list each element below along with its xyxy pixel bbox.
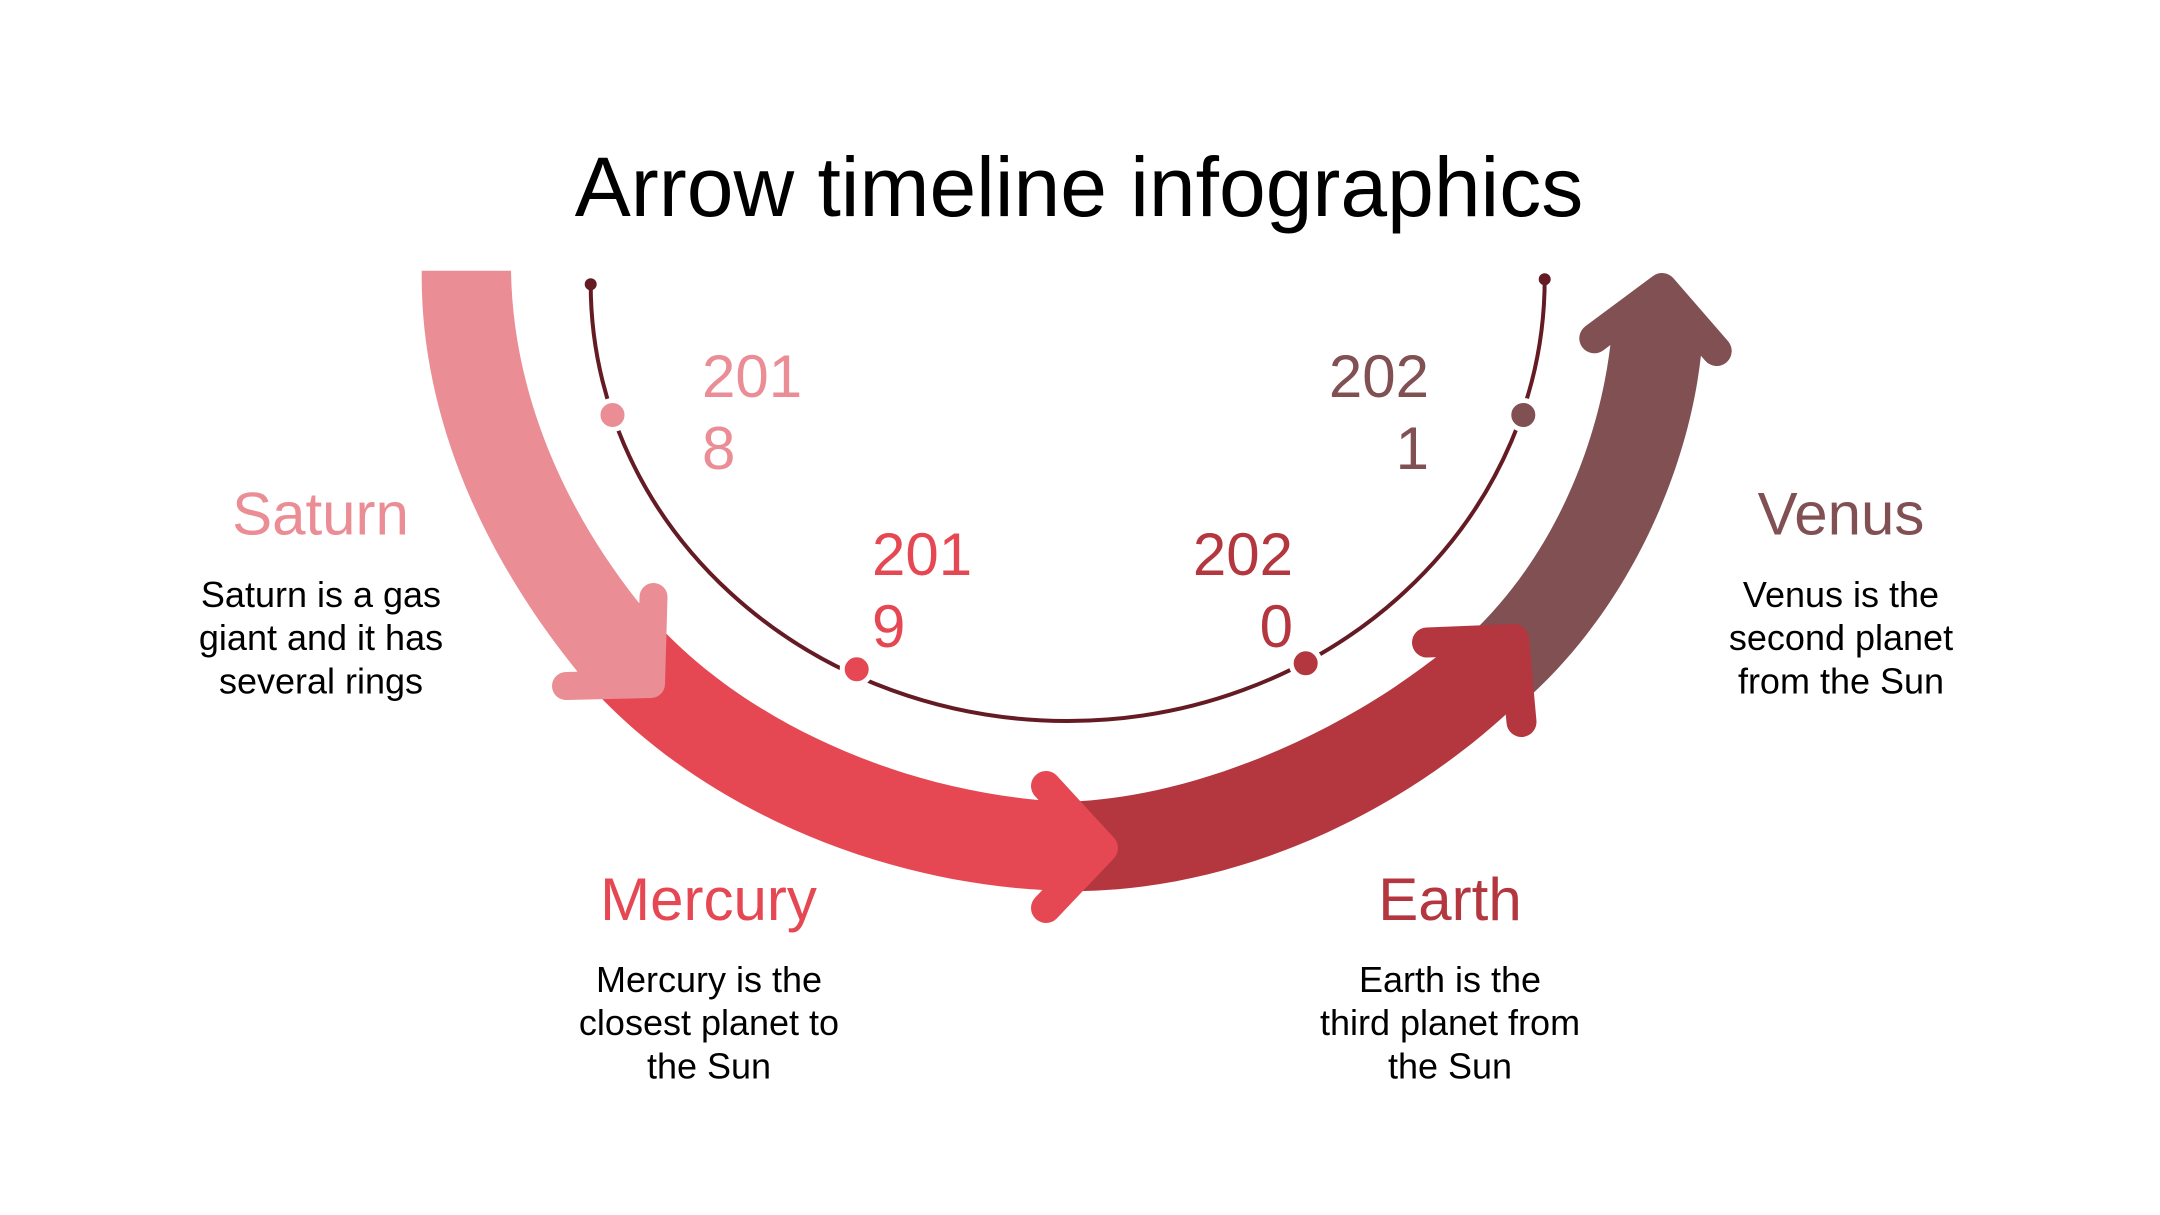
year: 2019: 201 [872,521,972,588]
text block: Mercury [579,866,839,1086]
description: Earth: the Sun [1388,1046,1512,1086]
text block: Saturn [199,480,443,702]
year: 2020: 202 [1193,521,1293,588]
title: Arrow timeline infographics [575,140,1583,234]
description: Earth: Earth is the [1359,959,1541,1000]
description: Saturn [199,574,443,702]
arrow: Earth [1060,639,1522,891]
description: Venus: second planet [1729,617,1953,658]
arrow: Saturn [422,271,654,686]
description: Venus: Venus is the [1743,574,1939,615]
arrow: Mercury [577,603,1103,908]
marker: 2018 [598,400,627,430]
year: 2021: 202 [1329,343,1429,410]
year: 2018: 201 [702,343,802,410]
description: Mercury: closest planet to [579,1002,839,1043]
marker: 2020 [1291,649,1320,678]
description: Earth [1320,959,1580,1086]
description: Mercury: Mercury is the [596,959,822,1000]
description: Venus [1729,574,1953,702]
description: Venus: from the Sun [1738,660,1944,702]
description: Mercury [579,959,839,1086]
year: 2020 [1193,521,1293,660]
description: Saturn: giant and it has [199,617,443,658]
description: Saturn: several rings [219,660,423,702]
heading: Saturn: Saturn [232,480,409,548]
heading: Venus: Venus [1758,480,1924,548]
marker: 2019 [842,655,871,684]
year: 2020: 0 [1260,593,1293,660]
text block: Earth [1320,866,1580,1086]
arrow: Venus [1470,288,1717,705]
heading: Mercury: Mercury [600,866,817,933]
year: 2019 [872,521,972,660]
timeline end point [1539,273,1551,285]
year: 2019: 9 [872,593,905,660]
year: 2018 [702,343,802,482]
text block: Venus [1729,480,1953,702]
heading: Earth: Earth [1378,866,1522,933]
marker: 2021 [1509,400,1538,430]
timeline start point [585,278,597,290]
year: 2018: 8 [702,415,735,482]
description: Earth: third planet from [1320,1002,1580,1043]
curved timeline line [591,279,1545,721]
description: Saturn: Saturn is a gas [201,574,441,615]
description: Mercury: the Sun [647,1046,771,1086]
year: 2021 [1329,343,1429,482]
year: 2021: 1 [1396,415,1429,482]
